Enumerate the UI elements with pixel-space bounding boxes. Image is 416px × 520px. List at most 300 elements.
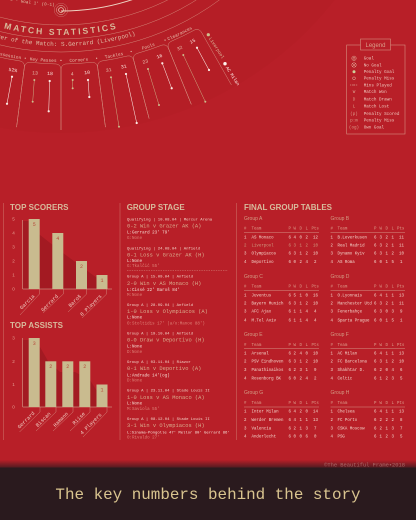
- table: group f: 1: [392, 353, 394, 357]
- table: group g: Pts: [312, 402, 319, 406]
- table: group h: 1: [386, 427, 388, 431]
- match: olympiacos away: L:None: [127, 317, 143, 321]
- table: group e: 2: [314, 377, 317, 381]
- table: group b: 2: [392, 253, 394, 257]
- table: group g: 13: [313, 419, 318, 423]
- table: group e: 9: [314, 369, 317, 373]
- table: group e: 6: [288, 377, 292, 381]
- table: group h: Chelsea: [338, 410, 355, 415]
- table: group d: 1: [330, 294, 334, 298]
- panel: top scorers: [10, 203, 112, 318]
- table: group f: P: [374, 344, 377, 348]
- statistic category labels: Key Passes: [30, 57, 56, 62]
- match: deportivo away: [127, 360, 201, 384]
- table: group c: M.Tel Aviv: [252, 318, 277, 323]
- table: group h: Group H: [330, 390, 350, 396]
- table: group b: Dynamo Kyiv: [338, 252, 365, 257]
- table: group f: 0: [386, 369, 388, 373]
- table: group f: 3: [392, 377, 394, 381]
- table: group a: 2: [306, 236, 308, 240]
- table: group a: 0: [300, 236, 302, 240]
- legend symbols: (p): [350, 112, 358, 117]
- credit: ©The Beautiful Frame•2018: [324, 462, 405, 469]
- table: group h: #: [330, 402, 334, 406]
- table: group g: #: [244, 402, 247, 406]
- chart shadow: [23, 221, 107, 289]
- table: group d: 1: [392, 294, 394, 298]
- table: group b: 2: [386, 245, 388, 249]
- table: group a: Deportivo: [252, 260, 274, 265]
- statistic category labels: •: [164, 40, 166, 41]
- table: group c: 4: [306, 319, 308, 323]
- table: group g: 3: [306, 427, 308, 431]
- icon: mins played: [350, 84, 358, 86]
- table: group d: 11: [399, 303, 404, 307]
- match: grazer away: Qualifying | 10.08.04 | Mercur Arena: [127, 217, 213, 222]
- table: group d: #: [330, 286, 334, 290]
- table: group b: L: [392, 227, 394, 231]
- statistic category labels: Tackles: [104, 52, 123, 58]
- axis labels: top scorers: Garcia: [19, 294, 36, 311]
- table: group e: 1: [306, 369, 308, 373]
- table: group d: Manchester Utd: [338, 302, 372, 307]
- match: monaco home: [127, 274, 201, 298]
- table: group e: 10: [313, 353, 318, 357]
- table: group d: 0: [386, 311, 388, 315]
- bar chart: top assists: 2: [66, 364, 69, 370]
- axis labels: top assists: Biscan: [35, 411, 52, 429]
- table: group e: Team: [252, 344, 262, 348]
- table: group e: 3: [294, 360, 296, 364]
- table: group h: CSKA Moscow: [338, 427, 365, 431]
- table: group d: Team: [338, 286, 348, 290]
- table: group h: 2: [386, 435, 388, 439]
- table: group c: 4: [314, 311, 317, 315]
- table: group h: 1: [392, 411, 394, 415]
- table: group c: Group C: [244, 274, 263, 280]
- table: group d: 2: [330, 303, 334, 307]
- statistic values: 15: [189, 38, 197, 46]
- table: group e: Panathinaikos: [252, 368, 284, 373]
- statistic category labels: [0, 27, 192, 62]
- table: group a: 6: [288, 245, 292, 249]
- statistic values: 18: [47, 71, 53, 77]
- series key: liverpool: Liverpool: [207, 36, 226, 60]
- bar chart: top scorers: 2: [12, 259, 15, 264]
- table: group b: 4: [330, 261, 334, 265]
- table: group c: 1: [300, 311, 302, 315]
- match: grazer home: [127, 246, 205, 269]
- table: group h: 6: [374, 419, 377, 423]
- table: group d: W: [380, 286, 382, 290]
- table: group b: 1: [400, 261, 403, 265]
- table: group d: 0: [380, 319, 382, 323]
- statistic panel outlines: [0, 26, 231, 130]
- legend labels: Mins Played: [364, 83, 392, 88]
- table: group f: Team: [338, 344, 348, 348]
- table: group b: Real Madrid: [338, 244, 365, 249]
- panel: final group tables: [244, 203, 405, 439]
- table: group f: D: [386, 344, 388, 348]
- table: group f: #: [330, 344, 334, 348]
- table: group d: 1: [386, 319, 388, 323]
- statistic values: 52%: [8, 67, 18, 74]
- table: group e: 4: [244, 377, 247, 381]
- match: grazer home: G:Tkalčić 55': [127, 264, 160, 269]
- table: group g: Team: [252, 402, 262, 406]
- table: group b: 1: [330, 236, 334, 240]
- table: group d: 1: [392, 303, 394, 307]
- match: grazer home: Qualifying | 24.08.04 | Anfield: [127, 246, 201, 251]
- legend: [347, 39, 405, 134]
- table: group c: 10: [313, 303, 318, 307]
- table: group e: 0: [306, 353, 308, 357]
- table: group h: 7: [400, 427, 403, 431]
- table: group g: Valencia: [252, 426, 272, 431]
- statistic values: 10: [84, 70, 90, 76]
- bar chart: top scorers: 5: [12, 217, 15, 222]
- heading: group stage: GROUP STAGE: [127, 203, 185, 212]
- table: group c: 6: [288, 311, 292, 315]
- table: group a: 2: [244, 245, 247, 249]
- axis labels: top scorers: Baroš: [68, 294, 83, 309]
- table: group f: 1: [330, 353, 334, 357]
- table: group e: 2: [294, 369, 296, 373]
- table: group a: 2: [306, 245, 308, 249]
- bar chart: top scorers: 5: [33, 222, 36, 228]
- table: group e: 3: [300, 369, 302, 373]
- match: grazer away: G:None: [127, 237, 143, 241]
- table: group g: 4: [294, 419, 296, 423]
- table: group e: P: [288, 344, 292, 348]
- table: group a: AS Monaco: [252, 236, 274, 240]
- table: group d: Fenerbahçe: [338, 310, 363, 315]
- statistic category labels: Corners: [70, 58, 88, 62]
- table: group g: 2: [244, 419, 247, 423]
- table: group f: 6: [374, 360, 377, 364]
- legend labels: Match Won: [364, 90, 387, 95]
- table: group d: Sparta Prague: [338, 319, 370, 323]
- panel: top assists: [10, 321, 112, 437]
- table: group a: 10: [313, 245, 318, 249]
- table: group h: D: [386, 402, 388, 406]
- ac milan stat lines: [6, 47, 210, 124]
- table: group b: 3: [380, 245, 382, 249]
- table: group b: 11: [399, 245, 404, 249]
- match: monaco away: Group A | 23.11.04 | Stade Louis II: [127, 389, 210, 394]
- table: group c: 2: [306, 303, 308, 307]
- legend symbols: p:m: [350, 119, 358, 124]
- bar chart: top scorers: 2: [80, 264, 83, 270]
- icon: penalty goal: [352, 70, 356, 73]
- table: group h: 2: [330, 419, 334, 423]
- statistic values: 31: [120, 63, 127, 71]
- footer band: [0, 460, 416, 520]
- table: group c: 6: [288, 294, 292, 298]
- series key: ac milan: AC Milan: [224, 66, 241, 87]
- match: deportivo home: 0-0 Draw v Deportivo (H): [127, 338, 205, 344]
- match: deportivo home: D:None: [127, 351, 143, 355]
- match: monaco home: Group A | 15.09.04 | Anfield: [127, 274, 194, 279]
- match: olympiacos away: Group A | 28.09.04 | Anfield: [127, 303, 194, 308]
- table: group b: P: [374, 227, 377, 231]
- table: group e: Pts: [312, 344, 319, 348]
- table: group a: Liverpool: [252, 244, 274, 249]
- table: group b: Team: [338, 227, 348, 231]
- chart shadow: [23, 340, 107, 407]
- table: group h: 6: [374, 427, 377, 431]
- table: group h: P: [374, 402, 377, 406]
- statistic values: 13: [32, 70, 38, 77]
- legend symbols: D: [353, 97, 356, 102]
- table: group h: 1: [380, 435, 382, 439]
- table: group a: 2: [300, 261, 302, 265]
- table: group a: P: [288, 227, 292, 231]
- table: group h: 2: [386, 419, 388, 423]
- table: group f: 2: [392, 360, 394, 364]
- bar chart: top assists: 0: [12, 405, 15, 410]
- match: deportivo away: D:None: [127, 380, 143, 384]
- table: group d: [330, 274, 405, 323]
- statistic values: 23: [142, 58, 149, 66]
- table: group f: [330, 332, 405, 381]
- table: group h: L: [392, 402, 394, 406]
- table: group c: D: [300, 286, 302, 290]
- bar chart: top assists: 2: [83, 364, 86, 370]
- match: deportivo home: [127, 332, 205, 355]
- table: group b: 3: [380, 236, 382, 240]
- table: group b: 2: [330, 245, 334, 249]
- table: group h: 2: [380, 419, 382, 423]
- liverpool stat lines: [32, 54, 206, 128]
- table: group f: AC Milan: [338, 352, 358, 357]
- table: group f: Celtic: [338, 376, 353, 381]
- table: group f: 10: [399, 360, 404, 364]
- match: olympiacos home: [127, 417, 230, 440]
- legend labels: Goal: [364, 57, 374, 62]
- table: group g: 4: [244, 435, 247, 439]
- match: grazer home: L:None: [127, 260, 143, 264]
- table: group b: 6: [374, 253, 377, 257]
- table: group b: 10: [399, 253, 404, 257]
- timeline arc: [61, 0, 156, 11]
- table: group a: Team: [252, 227, 262, 231]
- match: olympiacos away: O:Stoltidis 17' (a/o:Manoe 88'): [127, 321, 205, 326]
- legend labels: Own Goal: [364, 125, 385, 130]
- table: group d: 6: [374, 311, 377, 315]
- legend symbols: [349, 90, 359, 130]
- table: group h: Team: [338, 402, 348, 406]
- match: olympiacos home: Group A | 08.12.04 | Stade Louis II: [127, 417, 210, 422]
- match: olympiacos away: [127, 303, 208, 326]
- table: group b: #: [330, 227, 334, 231]
- table: group c: 0: [306, 294, 308, 298]
- table: group a: 3: [294, 253, 296, 257]
- match: olympiacos home: 3-1 Win v Olympiacos (H): [127, 423, 205, 429]
- table: group f: 1: [386, 353, 388, 357]
- statistic category labels: •: [24, 58, 26, 59]
- table: group f: 6: [374, 369, 377, 373]
- table: group f: Shakhtar D.: [338, 368, 365, 373]
- table: group g: 6: [288, 427, 292, 431]
- axis labels: top scorers: Gerrard: [40, 294, 60, 313]
- table: group g: 2: [294, 427, 296, 431]
- table: group g: Werder Bremen: [252, 418, 284, 423]
- table: group e: 6: [288, 369, 292, 373]
- table: group f: 1: [386, 360, 388, 364]
- column rules: [3, 203, 237, 440]
- table: group g: 6: [306, 435, 308, 439]
- table: group b: D: [386, 227, 388, 231]
- table: group a: 6: [288, 253, 292, 257]
- table: group g: 2: [300, 411, 302, 415]
- match: deportivo home: Group A | 19.10.04 | Anfield: [127, 332, 194, 337]
- match: deportivo away: L:Andrade 14'(og): [127, 373, 170, 378]
- table: group b: Pts: [397, 227, 405, 231]
- table: group g: 0: [306, 411, 308, 415]
- match: olympiacos home: L:Sinama-Pongolle 47' Mellor 80' Gerrard 86': [127, 430, 230, 435]
- table: group a: D: [300, 227, 302, 231]
- table: group d: 1: [386, 294, 388, 298]
- legend labels: No Goal: [364, 63, 382, 68]
- heading: top assists: TOP ASSISTS: [10, 321, 64, 330]
- match: grazer away: [127, 217, 213, 241]
- legend labels: Penalty Scored: [364, 112, 400, 117]
- bar chart: top scorers: 0: [12, 287, 15, 292]
- bar chart: top assists: 3: [33, 341, 36, 347]
- table: group e: 4: [300, 353, 302, 357]
- legend labels: Penalty Miss: [364, 119, 395, 124]
- table: group d: D: [386, 286, 388, 290]
- match: monaco away: [127, 389, 210, 412]
- match: olympiacos away: 1-0 Loss v Olympiacos (A): [127, 309, 208, 315]
- statistic category labels: Fouls: [142, 44, 155, 50]
- table: group c: 4: [306, 311, 308, 315]
- bar chart: top assists: [12, 336, 112, 410]
- heading: final group tables: FINAL GROUP TABLES: [244, 203, 333, 212]
- table: group f: Group F: [330, 332, 349, 338]
- table: group e: 10: [313, 360, 318, 364]
- table: group d: 3: [392, 311, 394, 315]
- icon: goal marker: [54, 3, 68, 17]
- legend labels: Penalty Miss: [364, 77, 395, 82]
- table: group b: B.Leverkusen: [338, 235, 368, 240]
- table: group d: Group D: [330, 274, 350, 280]
- legend labels: Match Lost: [364, 105, 390, 110]
- table: group g: 6: [288, 419, 292, 423]
- table: group a: Group A: [244, 216, 263, 222]
- table: group b: 2: [386, 236, 388, 240]
- table: group f: W: [380, 344, 382, 348]
- table: group g: 14: [313, 411, 318, 415]
- table: group h: 3: [330, 427, 334, 431]
- legend symbols: L: [353, 105, 356, 110]
- table: group c: 3: [294, 303, 296, 307]
- table: group e: 2: [300, 377, 302, 381]
- table: group c: Team: [252, 286, 262, 290]
- axis labels: top assists: 4 Players: [79, 412, 103, 436]
- table: group g: 1: [244, 411, 247, 415]
- table: group f: 5: [400, 377, 403, 381]
- table: group b: AS Roma: [338, 261, 355, 265]
- table: group c: #: [244, 286, 247, 290]
- table: group a: 6: [288, 261, 292, 265]
- table: group g: L: [306, 402, 308, 406]
- statistic category labels: Clearances: [168, 27, 192, 40]
- table: group a: 2: [306, 253, 308, 257]
- bar chart: top assists: 2: [12, 359, 15, 364]
- table: group e: [244, 332, 319, 381]
- table: group e: PSV Eindhoven: [252, 359, 284, 364]
- table: group a: Pts: [312, 227, 319, 231]
- table: group a: 3: [294, 245, 296, 249]
- table: group d: 13: [399, 294, 404, 298]
- table: group d: 1: [400, 319, 403, 323]
- table: group e: 1: [300, 360, 302, 364]
- table: group c: 1: [294, 319, 296, 323]
- table: group f: 2: [380, 369, 382, 373]
- table: group h: PSG: [338, 435, 345, 439]
- table: group f: 6: [400, 369, 403, 373]
- table: group d: 2: [386, 303, 388, 307]
- table: group f: Pts: [397, 344, 405, 348]
- table: group e: 6: [288, 353, 292, 357]
- table: group d: 4: [330, 319, 334, 323]
- icon: goal: [352, 56, 356, 60]
- statistic values: [8, 38, 197, 78]
- caption: The key numbers behind the story: [55, 486, 361, 504]
- table: group a: 0: [294, 261, 296, 265]
- table: group a: 4: [306, 261, 308, 265]
- table: group g: 0: [300, 435, 302, 439]
- table: group g: 7: [314, 427, 317, 431]
- table: group d: Pts: [397, 286, 405, 290]
- table: group c: Juventus: [252, 294, 272, 298]
- table: group b: 5: [392, 261, 394, 265]
- table: group h: W: [380, 402, 382, 406]
- match: deportivo home: L:None: [127, 345, 143, 349]
- table: group f: 13: [399, 353, 404, 357]
- table: group h: Pts: [397, 402, 405, 406]
- table: group c: L: [306, 286, 308, 290]
- table: group g: W: [294, 402, 296, 406]
- table: group c: 2: [244, 303, 247, 307]
- match: monaco away: L:None: [127, 403, 143, 407]
- table: group e: 6: [288, 360, 292, 364]
- table: group e: 4: [306, 377, 308, 381]
- table: group h: 2: [392, 419, 394, 423]
- table: group h: 1: [330, 411, 334, 415]
- table: group h: 6: [374, 411, 377, 415]
- table: group c: 3: [244, 311, 247, 315]
- axis labels: top assists: Riise: [72, 411, 87, 426]
- statistic values: 32: [176, 45, 184, 53]
- table: group d: 5: [392, 319, 394, 323]
- table: group f: 4: [330, 377, 334, 381]
- table: group e: 2: [294, 353, 296, 357]
- table: group b: W: [380, 227, 382, 231]
- table: group a: #: [244, 227, 247, 231]
- table: group d: 3: [380, 303, 382, 307]
- statistic category labels: •: [130, 50, 132, 52]
- table: group b: 6: [374, 236, 377, 240]
- table: group e: 1: [244, 353, 247, 357]
- table: group a: 1: [300, 245, 302, 249]
- bar chart: top assists: 2: [49, 364, 52, 370]
- legend labels: Match Drawn: [364, 97, 392, 102]
- bar chart: top scorers: 4: [56, 236, 59, 242]
- table: group a: L: [306, 227, 308, 231]
